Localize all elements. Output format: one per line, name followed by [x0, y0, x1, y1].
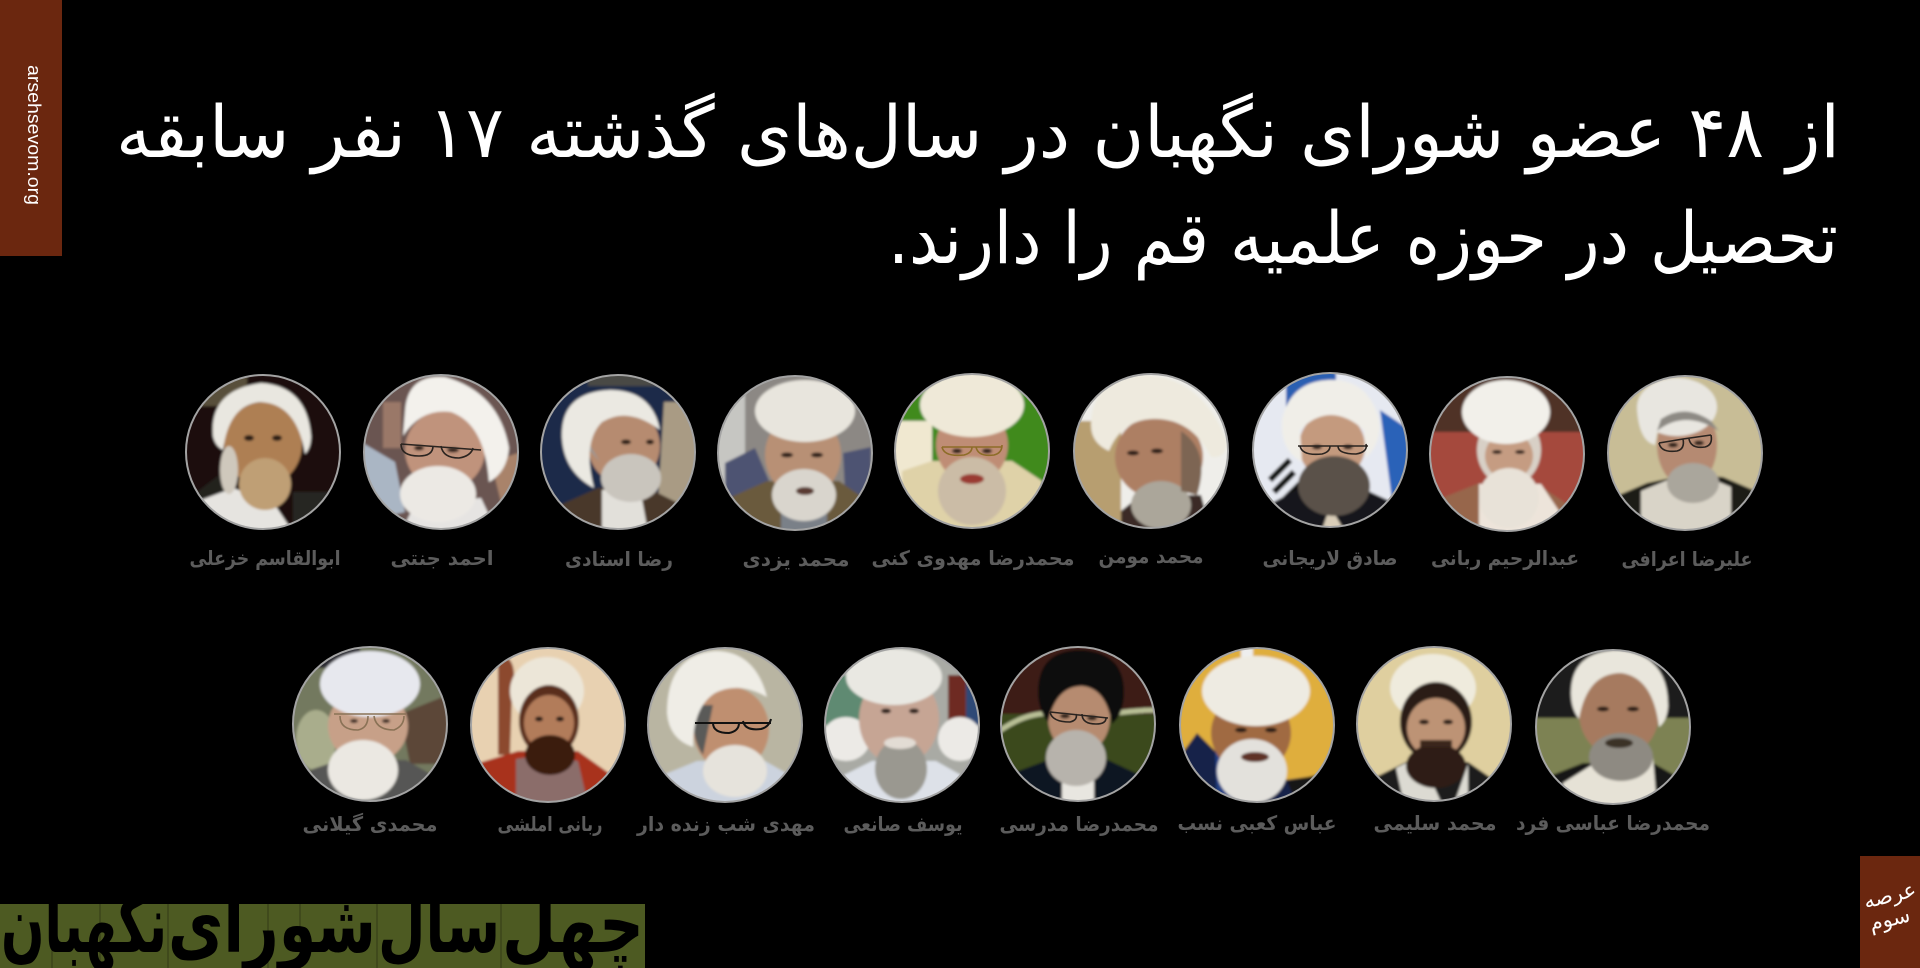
names: first row: علیرضا اعرافی — [1622, 547, 1752, 571]
side tab: arsehsevom.org: arsehsevom.org — [24, 65, 45, 205]
portrait: Mohammadi Gilani — [290, 644, 450, 804]
portrait: Abdolrahim Rabbani — [1427, 374, 1587, 534]
logo tab — [1860, 856, 1920, 968]
portrait: Abbas Kaabi Nasab — [1177, 645, 1337, 805]
title — [116, 90, 1840, 281]
names: second row: محمد سلیمی — [1374, 811, 1496, 835]
names: first row: رضا استادی — [565, 547, 673, 571]
names: second row: عباس کعبی نسب — [1178, 811, 1336, 835]
logo tab: سوم — [1866, 903, 1912, 936]
portrait: Abolghasem Khazali — [183, 372, 343, 532]
names: second row: محمدرضا عباسی فرد — [1516, 811, 1710, 835]
portrait: Yousef Sanei — [822, 645, 982, 805]
names: second row: مهدی شب زنده دار — [636, 812, 815, 836]
names: first row: محمد یزدی — [742, 547, 850, 571]
portrait: Mohammadreza Abbasi Fard — [1533, 647, 1693, 807]
portrait: Alireza Arafi — [1605, 373, 1765, 533]
names: second row: ربانی املشی — [498, 812, 602, 836]
portrait: Mohammad Momen — [1071, 371, 1231, 531]
names: first row — [190, 544, 1752, 571]
portrait: Mohammad Yazdi — [715, 373, 875, 533]
portrait: Sadegh Larijani — [1250, 370, 1410, 530]
title: تحصیل در حوزه علمیه قم را دارند. — [888, 196, 1838, 281]
banner: forty years of the Guardian Council — [0, 904, 645, 968]
names: first row: محمد مومن — [1098, 544, 1204, 568]
names: second row: محمدی گیلانی — [302, 812, 438, 836]
portrait: Mohammadreza Modarresi — [998, 644, 1158, 804]
portrait: Mehdi Shab Zendeh Dar — [645, 645, 805, 805]
names: first row: ابوالقاسم خزعلی — [190, 546, 340, 570]
names: second row: محمدرضا مدرسی — [1000, 812, 1158, 836]
names: first row: محمدرضا مهدوی کنی — [872, 546, 1074, 570]
portrait: Rabbani Amlashi — [468, 645, 628, 805]
side tab: arsehsevom.org — [0, 0, 62, 256]
names: first row: احمد جنتی — [390, 546, 494, 570]
portrait: Mohammad Salimi — [1354, 644, 1514, 804]
logo tab: عرصه — [1861, 877, 1918, 913]
portrait: Reza Ostadi — [538, 372, 698, 532]
names: first row: صادق لاریجانی — [1262, 546, 1398, 570]
names: first row: عبدالرحیم ربانی — [1431, 546, 1579, 570]
names: second row: یوسف صانعی — [844, 812, 962, 836]
portrait: Ahmad Jannati — [361, 372, 521, 532]
title: از ۴۸ عضو شورای نگهبان در سال‌های گذشته ۱۷ نفر سابقه — [116, 90, 1840, 175]
names: second row — [302, 811, 1710, 836]
portrait: Mohammadreza Mahdavi Kani — [892, 371, 1052, 531]
